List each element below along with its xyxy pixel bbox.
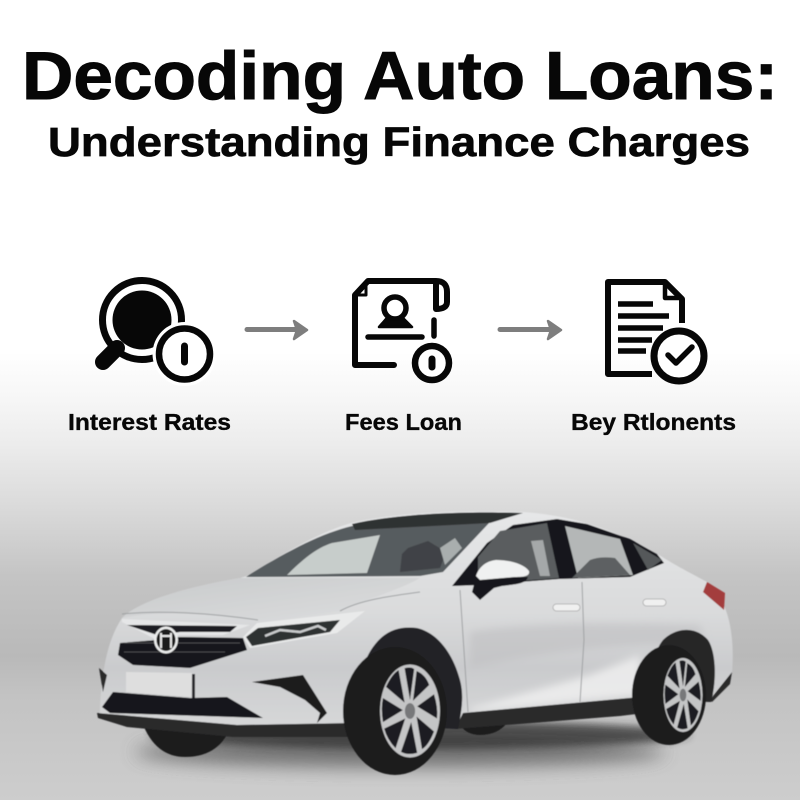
arrow: fees to key requirements (500, 321, 561, 339)
wing mirror (472, 560, 529, 600)
front splitter (97, 713, 357, 737)
rear door glass (565, 526, 633, 578)
icon: document with check mark (608, 282, 704, 381)
label: interest rates: Interest Rates (68, 409, 231, 435)
arrow: interest rates to fees (247, 321, 307, 339)
car illustration (97, 511, 733, 775)
rear tyre (632, 645, 706, 745)
badge (154, 626, 178, 654)
dark roof panel (352, 512, 523, 530)
front rim (380, 664, 440, 758)
door handles (553, 599, 666, 611)
front door glass (478, 523, 559, 584)
label: fees loan: Fees Loan (345, 409, 462, 435)
licence plate (126, 672, 195, 698)
rear wheel arch (640, 630, 715, 702)
car body (100, 511, 733, 735)
fog lamp vent (252, 675, 327, 723)
lower sill and rear bumper (455, 665, 732, 729)
icon: loan document with badge (355, 281, 452, 383)
title (22, 38, 778, 165)
title line 1: Decoding Auto Loans: (22, 38, 778, 114)
headlight (243, 611, 365, 648)
far wheels (142, 722, 508, 757)
front grille (118, 619, 250, 668)
lower grille (102, 692, 263, 718)
left vent (99, 668, 107, 692)
rear quarter glass (633, 543, 662, 570)
door reflections (470, 624, 705, 712)
hood (122, 578, 420, 622)
windshield (246, 522, 490, 577)
panel lines (122, 582, 584, 712)
title line 2: Understanding Finance Charges (48, 119, 750, 165)
front tyre (343, 647, 447, 775)
icon: magnifier with info badge (102, 280, 216, 386)
ground shadow (135, 721, 690, 767)
side window frame (452, 519, 664, 586)
rear rim (664, 658, 702, 732)
label: bey rtlonents: Bey Rtlonents (571, 409, 736, 435)
front wheel arch (352, 628, 462, 729)
tail light (703, 582, 725, 610)
